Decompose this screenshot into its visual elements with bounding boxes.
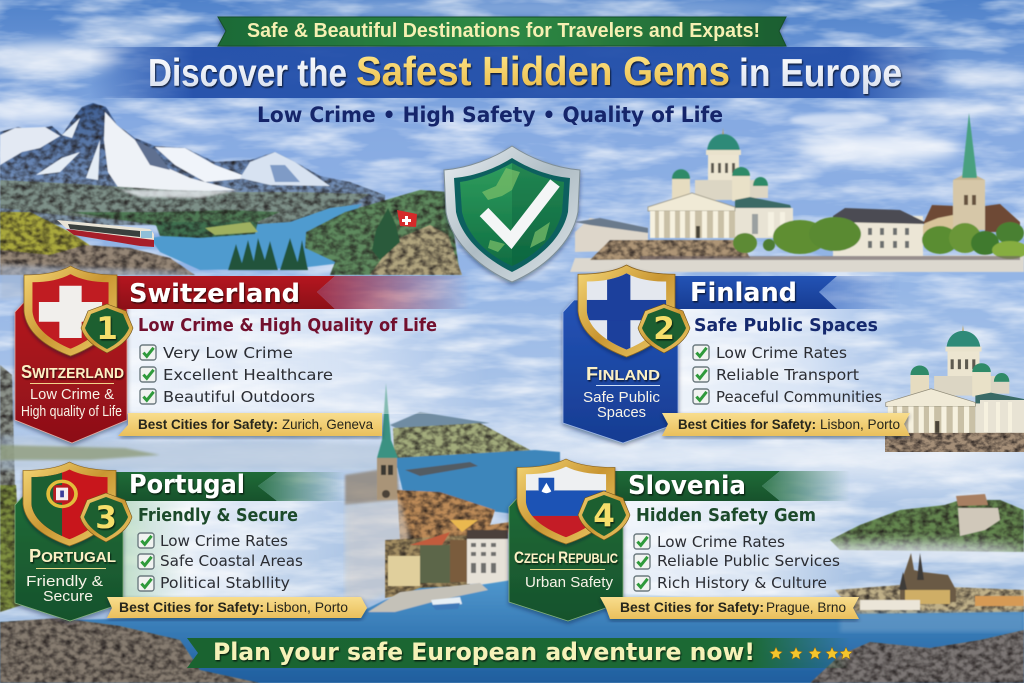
panel: Switzerland — [15, 266, 488, 443]
title text: in Europe — [739, 52, 902, 95]
icon: number 2 badge: 2 — [653, 311, 675, 347]
icon: number 1 badge: 1 — [96, 311, 118, 347]
title text: Discover the — [148, 52, 347, 95]
best cities strip: Czech Republic — [600, 597, 859, 619]
list item: Very Low Crime — [163, 344, 293, 362]
list item: Reliable Public Services — [657, 552, 840, 570]
list item: Rich History & Culture — [657, 574, 827, 592]
call to action banner: Plan your safe European adventure now! — [213, 638, 755, 666]
title ribbon: Slovenia: Slovenia — [628, 471, 746, 501]
panel backdrop: Switzerland — [118, 309, 488, 414]
panel backdrop: Slovenia — [615, 501, 855, 599]
panel: Slovenia — [509, 459, 859, 621]
icon: Finnish flag shield — [578, 265, 675, 357]
side banner: Czech Republic: Urban Safety — [525, 574, 614, 591]
panel: Portugal — [15, 462, 367, 621]
panel backdrop: Finland — [675, 309, 900, 414]
best cities strip: Finland — [662, 413, 910, 436]
scene: red mountain train — [57, 220, 154, 247]
scene: Swiss flag — [397, 210, 417, 227]
title text — [148, 48, 902, 95]
icon: number 1 badge — [81, 304, 133, 353]
side banner: Switzerland: High quality of Life — [21, 403, 122, 420]
list item: Excellent Healthcare — [163, 366, 333, 384]
icon: number 4 badge — [578, 491, 630, 540]
scene: old town waterfront — [345, 383, 560, 610]
list item: Low Crime Rates — [160, 532, 288, 550]
top green ribbon tagline: Safe & Beautiful Destinations for Travelers and Expats! — [247, 20, 760, 42]
best cities strip: Switzerland: Zurich, Geneva — [282, 416, 373, 432]
side banner: Switzerland — [15, 300, 127, 443]
icon: Portuguese flag shield — [23, 462, 116, 546]
title ribbon: Slovenia — [610, 471, 850, 501]
scene: lake and hills — [0, 190, 462, 300]
icon: number 4 badge: 4 — [593, 498, 615, 534]
icon: central safety shield with check mark — [444, 146, 580, 282]
title ribbon: Switzerland — [115, 276, 470, 309]
panel backdrop: Portugal — [118, 501, 358, 599]
list item: Political Stabllity — [160, 574, 290, 592]
icon: number 3 badge: 3 — [95, 500, 117, 536]
subheading: Slovenia: Hidden Safety Gem — [636, 505, 816, 526]
panel: Finland — [563, 265, 1024, 452]
best cities strip: Czech Republic: Prague, Brno — [766, 599, 846, 615]
subheading: Finland: Safe Public Spaces — [694, 315, 878, 336]
side banner: Portugal: Friendly & — [26, 573, 103, 590]
title ribbon: Finland — [665, 276, 900, 309]
icon: number 3 badge — [80, 493, 132, 542]
title ribbon: Portugal: Portugal — [129, 470, 245, 500]
title ribbon: Finland: Finland — [690, 278, 797, 308]
top green ribbon tagline — [218, 17, 786, 46]
scene: left shore — [0, 365, 400, 612]
scene: Helsinki-style cathedral square — [570, 113, 1024, 272]
list item: Reliable Transport — [716, 366, 859, 384]
side banner: Czech Republic: CZECH REPUBLIC — [514, 548, 618, 567]
title ribbon: Switzerland: Switzerland — [129, 279, 300, 309]
list item: Safe Coastal Areas — [160, 552, 303, 570]
side banner: Finland: FINLAND — [586, 364, 660, 384]
side banner: Portugal: PORTUGAL — [29, 546, 116, 566]
side banner: Switzerland: SWITZERLAND — [21, 362, 124, 382]
list item: Low Crime Rates — [716, 344, 847, 362]
best cities strip: Switzerland — [118, 413, 382, 436]
side banner: Czech Republic — [509, 495, 623, 621]
side banner: Finland — [563, 300, 678, 443]
scene: alpine mountains — [0, 103, 385, 228]
best cities strip: Czech Republic: Best Cities for Safety: — [620, 599, 764, 615]
scene: Prague-style town on the water — [835, 553, 1024, 632]
list item: Beautiful Outdoors — [163, 388, 315, 406]
side banner: Finland: Safe Public — [583, 389, 660, 406]
icon: number 2 badge — [638, 304, 690, 353]
icon: five gold stars — [770, 647, 852, 659]
best cities strip: Switzerland: Best Cities for Safety: — [138, 416, 278, 432]
side banner: Portugal: Secure — [43, 588, 93, 605]
landmark: small cathedral — [885, 325, 1024, 452]
icon: Swiss flag shield — [24, 266, 117, 356]
best cities strip: Portugal: Lisbon, Porto — [266, 599, 348, 615]
side banner: Finland: Spaces — [597, 404, 646, 421]
best cities strip: Finland: Lisbon, Porto — [820, 416, 900, 432]
list item: Peaceful Communities — [716, 388, 882, 406]
title band — [90, 47, 950, 98]
subheading: Switzerland: Low Crime & High Quality of Life — [138, 315, 437, 336]
title text: Safest Hidden Gems — [356, 48, 730, 94]
list item: Low Crime Rates — [657, 533, 785, 551]
best cities strip: Portugal — [107, 597, 367, 618]
side banner: Switzerland: Low Crime & — [30, 386, 114, 403]
best cities strip: Portugal: Best Cities for Safety: — [119, 599, 264, 615]
best cities strip: Finland: Best Cities for Safety: — [678, 416, 816, 432]
subheading: Portugal: Friendly & Secure — [138, 505, 298, 526]
scene: rocky foreground — [0, 618, 1024, 683]
icon: Slovenian flag shield — [517, 459, 615, 546]
subtitle: Low Crime • High Safety • Quality of Life — [257, 103, 723, 127]
title ribbon: Portugal — [115, 470, 345, 501]
scene: Bled-style hill and castle — [770, 494, 1024, 561]
side banner: Portugal — [15, 493, 123, 621]
scene: lake below the panels — [0, 580, 1024, 683]
